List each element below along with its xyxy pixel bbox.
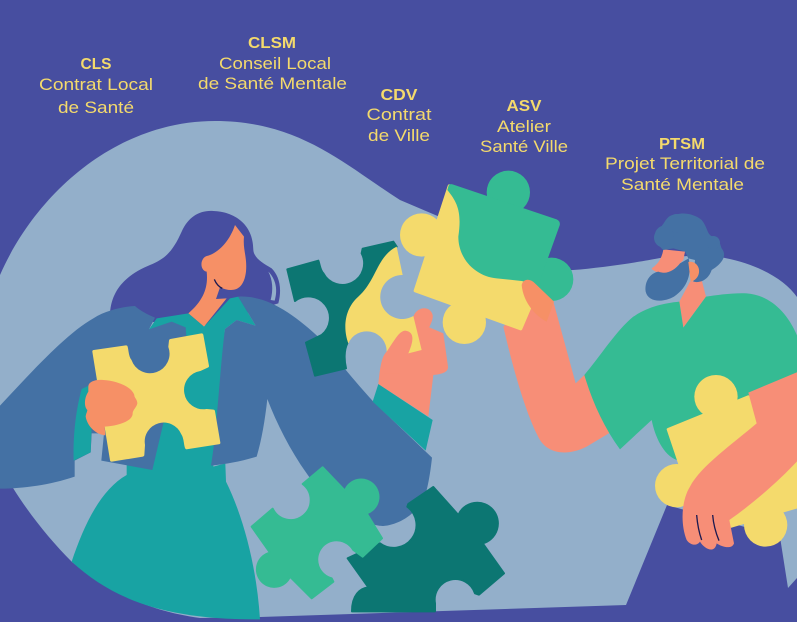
label: CLSM: de Santé Mentale bbox=[198, 74, 347, 93]
label: CLS: CLS bbox=[80, 56, 112, 73]
finger line one bbox=[697, 515, 702, 540]
man beard bbox=[645, 258, 690, 301]
puzzle piece held by woman bbox=[94, 335, 219, 460]
label: ASV: Santé Ville bbox=[480, 137, 568, 156]
woman sleeve cuff bbox=[373, 384, 433, 451]
dark teal puzzle piece on floor bbox=[348, 487, 504, 611]
green body bbox=[447, 184, 560, 285]
label: PTSM: PTSM bbox=[659, 136, 705, 153]
curl left bbox=[654, 228, 674, 248]
label: ASV bbox=[480, 98, 568, 156]
woman inner sleeve bbox=[74, 385, 92, 461]
label: CDV: Contrat bbox=[366, 105, 432, 124]
woman jacket left side bbox=[0, 306, 187, 489]
man neck bbox=[679, 280, 706, 328]
green puzzle piece on floor bbox=[252, 467, 382, 598]
label: ASV: ASV bbox=[506, 98, 542, 115]
man thumb bbox=[522, 280, 554, 322]
yellow body bbox=[415, 186, 540, 329]
label: CLSM: Conseil Local bbox=[219, 54, 331, 73]
hair highlight strand bbox=[268, 272, 276, 301]
woman illustration bbox=[0, 211, 504, 619]
woman dress bbox=[72, 297, 260, 619]
label: CDV: CDV bbox=[380, 87, 418, 104]
curl right bbox=[707, 236, 720, 249]
piece left tab bbox=[655, 464, 698, 507]
woman raised hand bbox=[378, 308, 448, 417]
label: CLSM bbox=[198, 35, 347, 93]
label: CLSM: CLSM bbox=[248, 35, 296, 52]
man hair bbox=[654, 214, 724, 282]
piece top tab bbox=[694, 375, 738, 418]
finger line two bbox=[713, 515, 719, 541]
light blue blob bbox=[0, 121, 797, 618]
label: CLS: Contrat Local bbox=[39, 75, 153, 94]
label: ASV: Atelier bbox=[497, 117, 551, 136]
woman hand bbox=[85, 380, 137, 435]
dark teal puzzle piece bbox=[287, 242, 397, 376]
label: PTSM bbox=[605, 136, 765, 194]
hair mass bbox=[655, 214, 724, 282]
yellow bottom tab bbox=[443, 301, 486, 344]
curl top bbox=[667, 214, 686, 233]
man lower arm and hand bbox=[683, 372, 797, 549]
large raised puzzle piece bbox=[400, 171, 573, 344]
label: PTSM: Santé Mentale bbox=[621, 175, 744, 194]
label: CLS: de Santé bbox=[58, 98, 134, 117]
man shirt bbox=[584, 293, 797, 460]
puzzle piece held by man bbox=[655, 375, 797, 547]
label: CDV: de Ville bbox=[368, 126, 430, 145]
yellow half of middle piece bbox=[345, 247, 422, 353]
woman index finger bbox=[383, 331, 412, 373]
woman jacket right side bbox=[211, 297, 432, 526]
label: CLS bbox=[39, 56, 153, 117]
man illustration bbox=[400, 171, 797, 549]
man ear bbox=[688, 262, 699, 282]
man raised arm bbox=[503, 302, 620, 452]
label: CDV bbox=[366, 87, 432, 145]
piece bottom tab bbox=[744, 503, 787, 547]
green top tab bbox=[487, 171, 530, 214]
man face bbox=[652, 249, 685, 274]
woman smile bbox=[214, 279, 222, 288]
green right tab bbox=[530, 258, 573, 301]
woman hair bbox=[110, 211, 280, 327]
finger lines bbox=[697, 515, 719, 541]
woman face and neck bbox=[188, 225, 246, 327]
piece body bbox=[668, 397, 797, 527]
label: PTSM: Projet Territorial de bbox=[605, 154, 765, 173]
yellow left tab bbox=[400, 213, 443, 257]
